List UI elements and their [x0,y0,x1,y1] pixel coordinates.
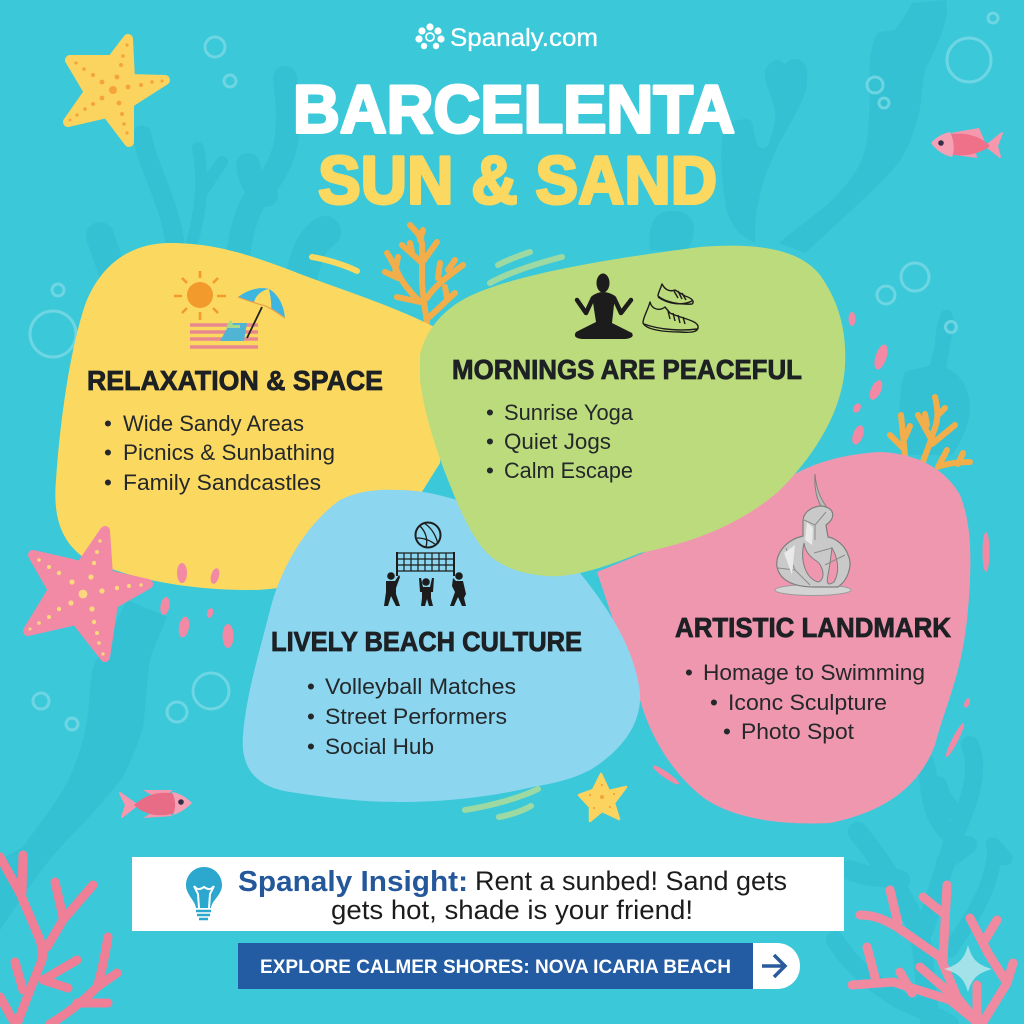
list: mornings: Sunrise Yoga [504,400,633,425]
title: BARCELENTA [293,72,735,148]
small yellow starfish [579,774,626,821]
list: mornings: • [486,429,494,454]
pink fish top right [931,128,1002,158]
list: artistic: Photo Spot [741,719,855,744]
list: lively: • [307,704,315,729]
list: artistic: Homage to Swimming [703,660,925,685]
list: mornings: • [486,458,494,483]
yellow starfish [68,39,165,142]
panel: artistic landmark [597,452,970,823]
list: relaxation: • [104,470,112,495]
list: relaxation [104,411,335,495]
pink starfish [28,531,148,657]
list: lively: Social Hub [325,734,434,759]
list: relaxation: • [104,440,112,465]
list: artistic: • [710,690,718,715]
heading: artistic: ARTISTIC LANDMARK [675,612,951,643]
coral pink bottom right [852,885,1013,1024]
list: lively: • [307,734,315,759]
panel: relaxation and space [55,243,450,590]
list: artistic: Iconc Sculpture [728,690,887,715]
callout: spanaly insight: Rent a sunbed! Sand gets [475,866,787,896]
list: mornings [486,400,633,483]
list: relaxation: Picnics & Sunbathing [123,440,335,465]
panel: lively beach culture [243,490,640,802]
sparkle [944,945,992,992]
button: explore calmer shores: EXPLORE CALMER SHORES: NOVA ICARIA BEACH [260,956,731,978]
heading: lively: LIVELY BEACH CULTURE [271,626,582,657]
coral pink bottom left [0,855,117,1024]
title: SUN & SAND [318,144,717,218]
list: artistic: • [685,660,693,685]
heading: mornings: MORNINGS ARE PEACEFUL [452,354,802,385]
callout: spanaly insight: gets hot, shade is your friend! [331,895,693,925]
icon: volleyball net and players [384,522,466,606]
bubbles [30,13,998,730]
panel: mornings are peaceful [420,246,845,576]
coral orange right [890,397,970,467]
list: mornings: Quiet Jogs [504,429,611,454]
icon: light bulb [186,867,222,919]
list: lively: • [307,674,315,699]
small strokes near orange coral [312,252,562,283]
list: lively: Volleyball Matches [325,674,516,699]
list: relaxation: • [104,411,112,436]
list: lively [307,674,516,759]
icon: swimming sculpture [775,474,851,596]
callout: spanaly insight: Spanaly Insight: [238,866,468,898]
logo: Spanaly.com [450,24,598,52]
list: artistic [685,660,925,744]
list: lively: Street Performers [325,704,507,729]
icon: arrow [762,955,785,977]
list: mornings: • [486,400,494,425]
coral orange centre [385,225,463,322]
icon: meditating figure and running shoes [575,274,698,339]
pink fish bottom left [120,790,192,818]
list: relaxation: Family Sandcastles [123,470,321,495]
list: artistic: • [723,719,731,744]
list: mornings: Calm Escape [504,458,633,483]
heading: relaxation: RELAXATION & SPACE [87,365,383,396]
small green strokes below blue panel [465,789,538,817]
pink droplets [159,312,989,787]
callout: spanaly insight [132,857,844,931]
title [293,72,735,218]
list: relaxation: Wide Sandy Areas [123,411,304,436]
button: explore calmer shores [238,943,800,989]
icon: sun, umbrella and towel [174,271,285,347]
